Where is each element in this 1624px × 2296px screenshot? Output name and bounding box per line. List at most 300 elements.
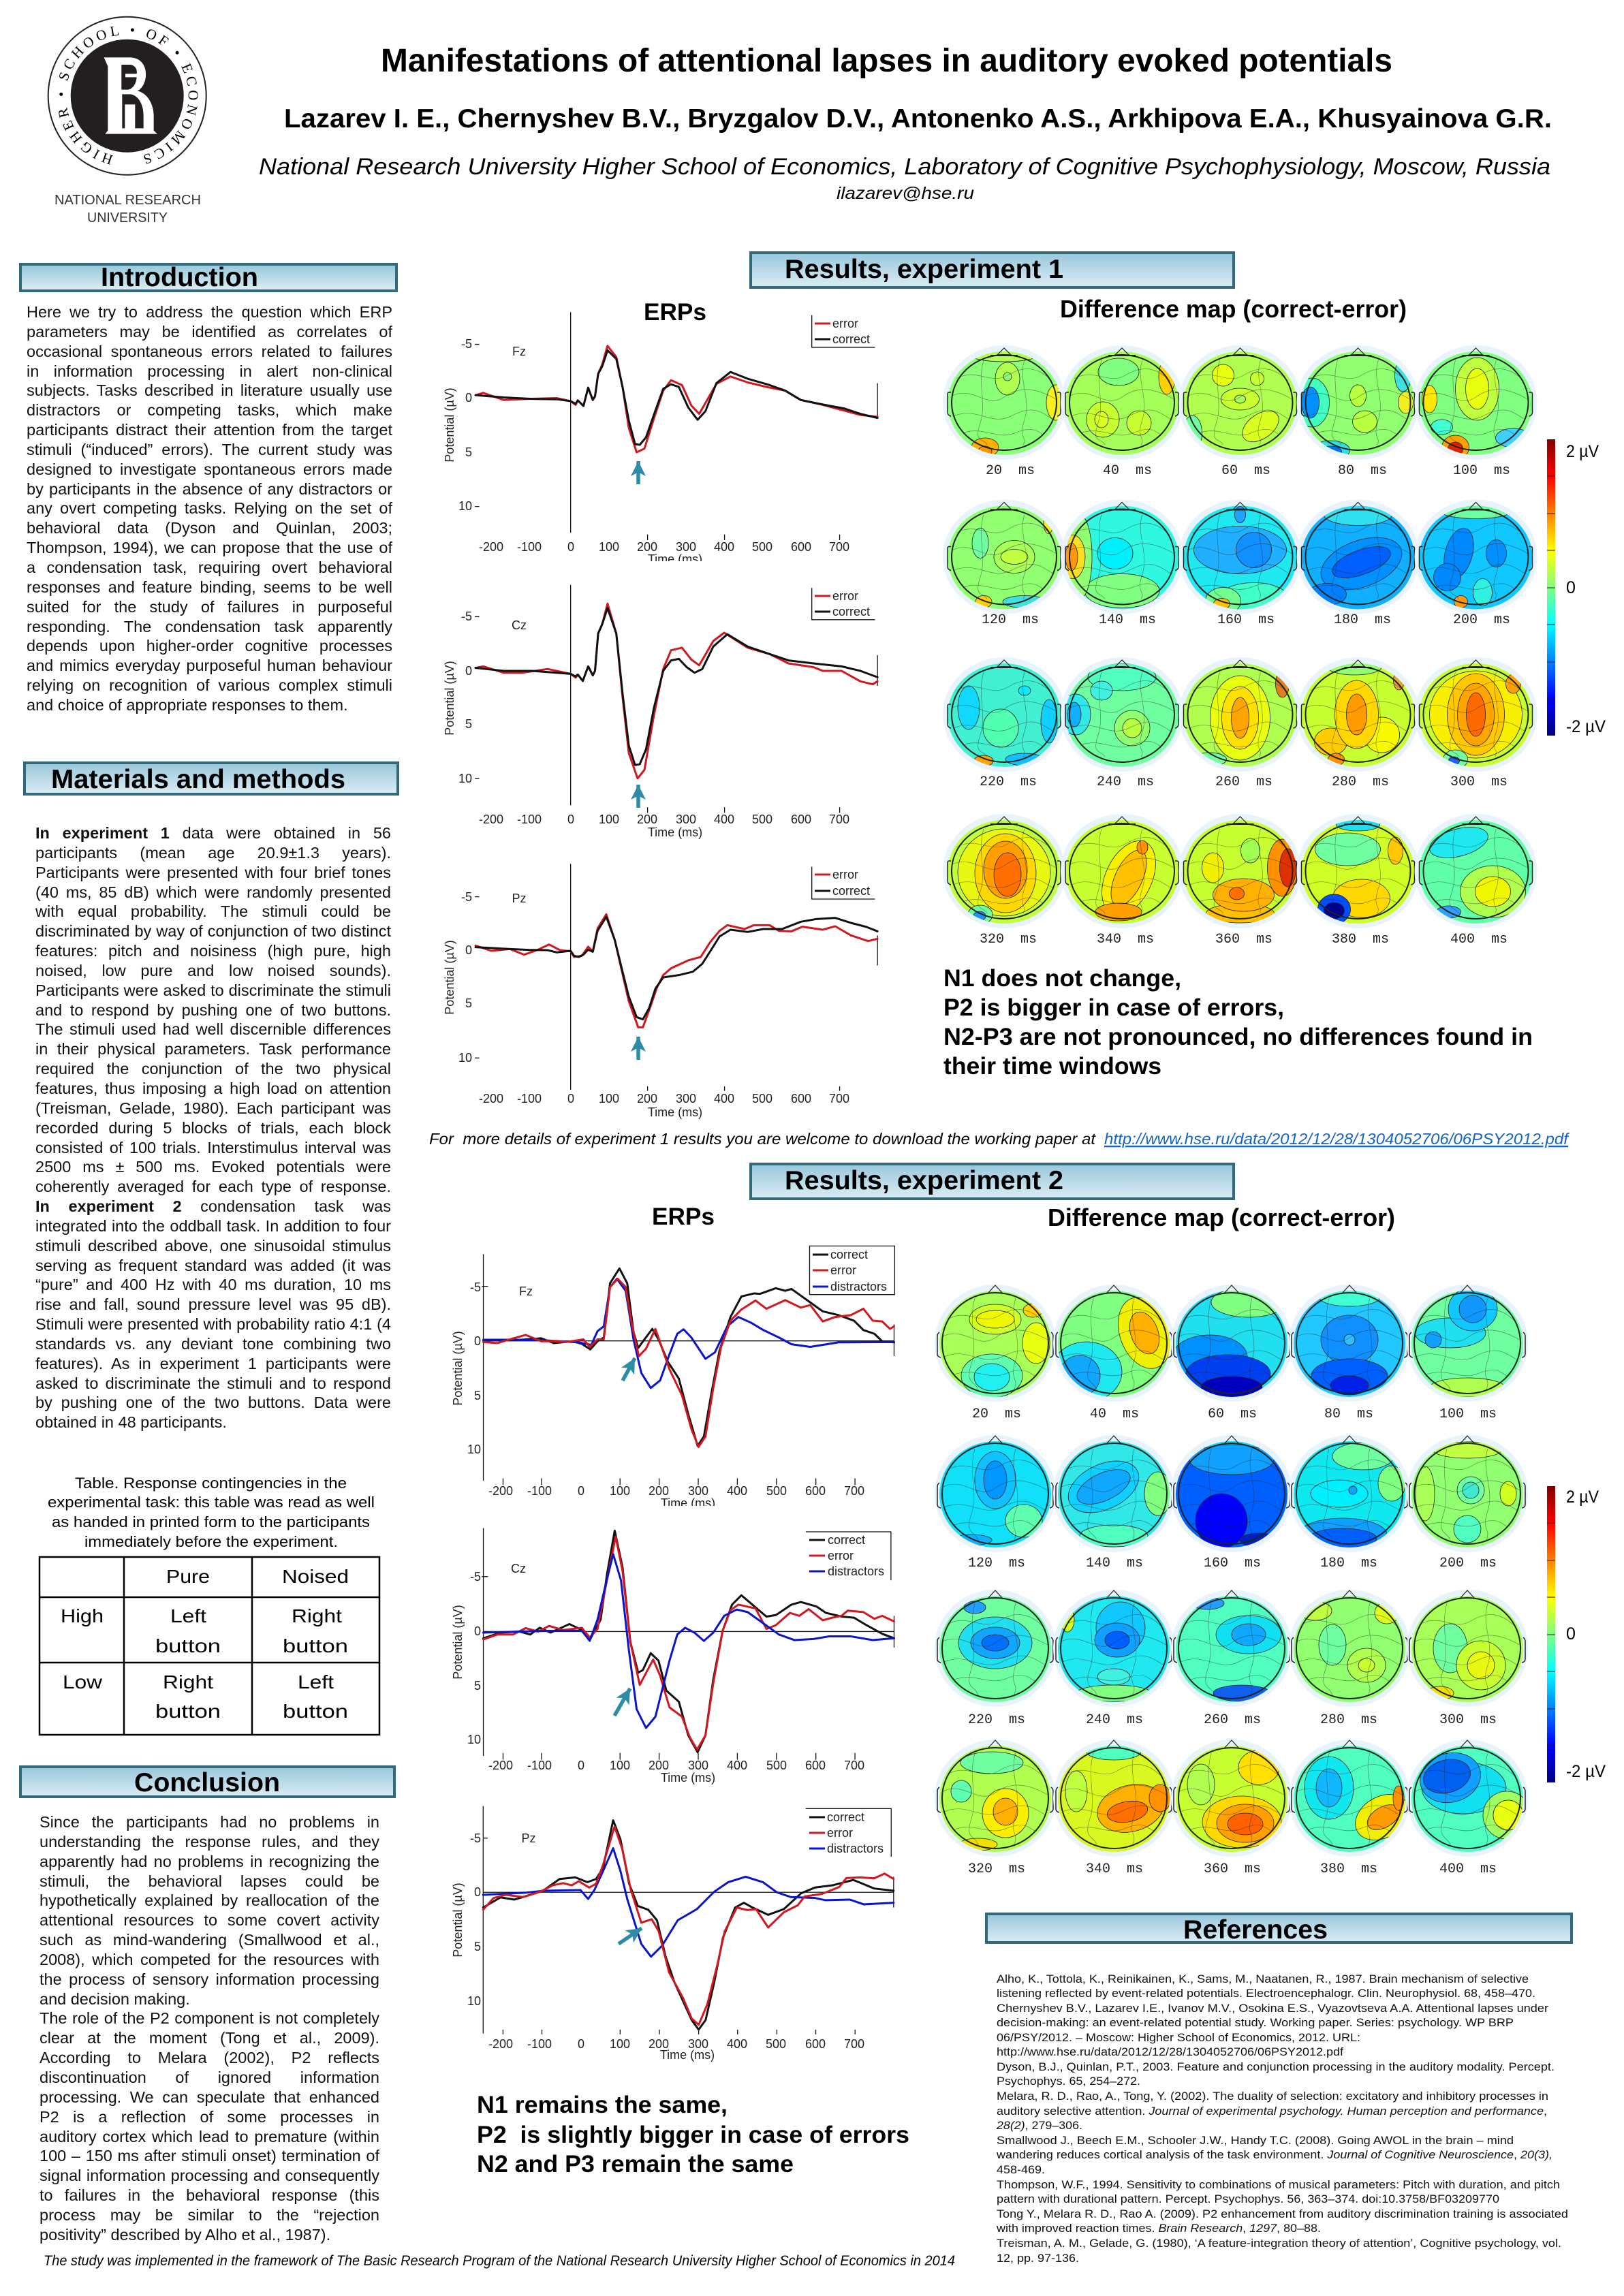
time labels: experiment 1: 160 ms bbox=[1217, 612, 1275, 628]
chart: experiment 1 Fz: 300 bbox=[676, 540, 696, 554]
chart: experiment 1 Pz: 700 bbox=[829, 1092, 849, 1105]
topomap 100 ms bbox=[1406, 1285, 1529, 1402]
table: response contingencies bbox=[40, 1557, 379, 1735]
chart: experiment 1 Pz: 0 bbox=[465, 943, 472, 957]
chart: experiment 1 Cz: 700 bbox=[829, 813, 849, 826]
chart: experiment 2 Fz: distractors bbox=[830, 1280, 887, 1293]
text block: introduction: Here we try to address the question which ERP bbox=[27, 303, 392, 321]
text block: introduction: stimuli (“induced” errors). The current study was bbox=[27, 441, 392, 458]
text block: introduction: and choice of appropriate responses to them. bbox=[27, 696, 348, 714]
chart: experiment 1 Cz: 5 bbox=[465, 717, 472, 731]
title: Manifestations of attentional lapses in auditory evoked potentials bbox=[381, 43, 1392, 79]
text block: materials and methods: features: pitch and noisiness (high pure, high bbox=[35, 942, 391, 960]
chart: experiment 1 Fz: 100 bbox=[599, 540, 619, 554]
references list: Chernyshev B.V., Lazarev I.E., Ivanov M.V., Osokina E.S., Vyazovtseva A.A. Attentional lapses under bbox=[997, 2002, 1548, 2015]
text block: introduction: subjects. Tasks described in literature usually use bbox=[27, 381, 392, 399]
chart: experiment 2 Cz: 300 bbox=[688, 1759, 708, 1772]
table: response contingencies: Left bbox=[298, 1671, 334, 1693]
colour scale: experiment 2: -2 µV bbox=[1566, 1762, 1606, 1781]
chart: experiment 1 Cz: 100 bbox=[599, 813, 619, 826]
text block: materials and methods: (Treisman, Gelade, 1980). Each participant was bbox=[35, 1099, 391, 1117]
chart: experiment 1 Pz: 200 bbox=[637, 1092, 657, 1105]
chart: experiment 1 Fz: 600 bbox=[791, 540, 811, 554]
topomap 160 ms bbox=[1170, 1435, 1293, 1552]
chart: experiment 2 Fz: -5 bbox=[470, 1280, 481, 1294]
heading: Introduction bbox=[20, 263, 396, 292]
note: working paper link: http://www.hse.ru/data/2012/12/28/1304052706/06PSY2012.pdf bbox=[1104, 1130, 1570, 1148]
time labels: experiment 2: 360 ms bbox=[1204, 1861, 1261, 1877]
topomap 100 ms bbox=[1414, 345, 1537, 460]
references list: 458-469. bbox=[997, 2163, 1045, 2176]
text block: conclusion: 100 – 150 ms after stimuli onset) termination of bbox=[40, 2147, 379, 2165]
chart: experiment 2 Fz: -200 bbox=[488, 1484, 513, 1498]
table caption: as handed in printed form to the participants bbox=[52, 1513, 370, 1530]
chart: experiment 1 Fz: 400 bbox=[714, 540, 734, 554]
time labels: experiment 2: 320 ms bbox=[968, 1861, 1025, 1877]
chart: experiment 2 Cz: 100 bbox=[610, 1759, 630, 1772]
text block: materials and methods: standards vs. any deviant tone combining two bbox=[35, 1335, 391, 1353]
text block: introduction: designed to investigate spontaneous errors made bbox=[27, 460, 392, 478]
chart: experiment 1 Fz: Time (ms) bbox=[648, 552, 702, 566]
table: response contingencies: Right bbox=[163, 1671, 213, 1693]
references list: 12, pp. 97-136. bbox=[997, 2252, 1079, 2265]
subheading: difference map experiment 1: Difference map (correct-error) bbox=[1060, 295, 1407, 323]
colour scale: experiment 2: 2 µV bbox=[1566, 1488, 1599, 1507]
table: response contingencies: button bbox=[283, 1635, 348, 1656]
chart: experiment 1 Fz: 5 bbox=[465, 445, 472, 459]
references list: wandering reduces cortical analysis of the task environment. Journal of Cognitive Neuroscience , 20(3), bbox=[996, 2148, 1552, 2161]
text block: materials and methods: (40 ms, 85 dB) which were randomly presented bbox=[35, 883, 391, 901]
chart: experiment 2 Pz: 0 bbox=[474, 1885, 481, 1899]
time labels: experiment 1: 100 ms bbox=[1453, 463, 1510, 479]
topomap 180 ms bbox=[1288, 1435, 1411, 1552]
topomap 300 ms bbox=[1414, 657, 1537, 772]
chart: experiment 2 Pz: 700 bbox=[844, 2037, 864, 2051]
note: working paper link bbox=[429, 1130, 1570, 1148]
time labels: experiment 1: 340 ms bbox=[1097, 932, 1154, 947]
topomap 120 ms bbox=[943, 499, 1065, 614]
chart: experiment 2 Cz: 0 bbox=[578, 1759, 584, 1772]
text block: conclusion: such as mind-wandering (Smallwood et al., bbox=[40, 1931, 379, 1949]
text block: introduction: occasional spontaneous errors related to failures bbox=[27, 343, 392, 360]
findings: experiment 1: N2-P3 are not pronounced, no differences found in bbox=[943, 1024, 1533, 1050]
topomap 200 ms bbox=[1414, 499, 1537, 614]
chart: experiment 2 Fz: 0 bbox=[474, 1334, 481, 1348]
text block: materials and methods: Participants were presented with four brief tones bbox=[35, 864, 391, 881]
colour scale: experiment 1: 2 µV bbox=[1566, 442, 1599, 461]
chart: experiment 1 Pz: correct bbox=[832, 884, 870, 898]
text block: introduction: responding. The condensation task apparently bbox=[27, 617, 392, 635]
findings: experiment 2: P2 is slightly bigger in case of errors bbox=[477, 2122, 909, 2148]
text block: materials and methods: features, thus imposing a high load on attention bbox=[35, 1080, 391, 1097]
chart: experiment 1 Pz: 500 bbox=[752, 1092, 772, 1105]
chart: experiment 2 Pz: 600 bbox=[805, 2037, 826, 2051]
topomap 20 ms bbox=[934, 1285, 1057, 1402]
affiliation: National Research University Higher School of Economics, Laboratory of Cognitive Psychophysiology, Moscow, Russia bbox=[259, 154, 1550, 180]
chart: experiment 2 Fz: 500 bbox=[766, 1484, 787, 1498]
chart: experiment 2 Cz: 200 bbox=[649, 1759, 669, 1772]
text block: materials and methods: Participants were asked to discriminate the stimuli bbox=[35, 981, 391, 999]
topomap 220 ms bbox=[934, 1590, 1057, 1707]
text block: introduction: in information processing in alert non-clinical bbox=[27, 362, 392, 380]
topomap 280 ms bbox=[1288, 1590, 1411, 1707]
time labels: experiment 1: 20 ms bbox=[986, 463, 1035, 479]
chart: experiment 2 Fz: Fz bbox=[519, 1285, 533, 1298]
text block: materials and methods: obtained in 48 participants. bbox=[35, 1413, 227, 1431]
chart: experiment 2 Pz: error bbox=[827, 1826, 853, 1840]
chart: experiment 1 Fz: -100 bbox=[517, 540, 542, 554]
text block: introduction: parameters may be identified as correlates of bbox=[27, 323, 392, 341]
findings: experiment 2 bbox=[477, 2092, 909, 2177]
chart: experiment 1 Fz: 200 bbox=[637, 540, 657, 554]
topomap 180 ms bbox=[1297, 499, 1420, 614]
chart: experiment 1 Pz: 5 bbox=[465, 996, 472, 1010]
topomap 140 ms bbox=[1061, 499, 1183, 614]
chart: experiment 1 Cz: 500 bbox=[752, 813, 772, 826]
text block: conclusion: to failures in the behavioral response (this bbox=[40, 2186, 379, 2204]
chart: experiment 2 Fz: Potential (µV) bbox=[451, 1331, 465, 1406]
heading: References: References bbox=[1183, 1915, 1328, 1945]
chart: experiment 1 Fz: correct bbox=[832, 332, 870, 346]
chart: experiment 2 Pz: 500 bbox=[766, 2037, 786, 2051]
chart: experiment 2 Cz: -5 bbox=[470, 1570, 481, 1584]
references list: decision-making: an event-related potential study. Working paper. Series: psychology. WP BRP bbox=[997, 2016, 1514, 2029]
chart: experiment 1 Pz: Pz bbox=[512, 892, 527, 905]
chart: experiment 2 Cz: -200 bbox=[488, 1759, 513, 1772]
chart: experiment 2 Cz: 5 bbox=[474, 1679, 481, 1693]
topomap 240 ms bbox=[1052, 1590, 1175, 1707]
time labels: experiment 1: 380 ms bbox=[1332, 932, 1389, 947]
heading: Results, experiment 2: Results, experiment 2 bbox=[785, 1166, 1063, 1195]
chart: experiment 1 Pz: 600 bbox=[791, 1092, 811, 1105]
text block: materials and methods: stimuli described above, one sinusoidal stimulus bbox=[35, 1237, 391, 1255]
findings: experiment 2: N2 and P3 remain the same bbox=[477, 2151, 794, 2177]
heading: Conclusion bbox=[20, 1767, 394, 1797]
chart: experiment 1 Cz: -100 bbox=[517, 813, 542, 826]
text block: conclusion: stimuli, the behavioral lapses could be bbox=[40, 1872, 379, 1890]
time labels: experiment 2: 80 ms bbox=[1324, 1406, 1373, 1422]
chart: experiment 2 Fz bbox=[451, 1246, 894, 1513]
topomap 140 ms bbox=[1052, 1435, 1175, 1552]
topomap 400 ms bbox=[1414, 813, 1537, 929]
text block: materials and methods: In experiment 2 condensation task was bbox=[35, 1197, 391, 1215]
chart: experiment 1 Fz: Fz bbox=[512, 345, 526, 358]
text block: materials and methods: coherently averaged for each type of response. bbox=[35, 1178, 391, 1195]
text block: conclusion: The role of the P2 component is not completely bbox=[40, 2009, 379, 2027]
chart: experiment 1 Cz bbox=[443, 585, 877, 839]
table: response contingencies: button bbox=[283, 1701, 348, 1722]
references list: http://www.hse.ru/data/2012/12/28/1304052706/06PSY2012.pdf bbox=[997, 2045, 1343, 2058]
chart: experiment 2 Cz: 400 bbox=[727, 1759, 747, 1772]
chart: experiment 1 Cz: Time (ms) bbox=[648, 825, 702, 839]
time labels: experiment 1: 260 ms bbox=[1215, 774, 1272, 790]
chart: experiment 1 Cz: 300 bbox=[676, 813, 696, 826]
text block: materials and methods: The stimuli used had well discernible differences bbox=[35, 1020, 391, 1038]
topomap 320 ms bbox=[943, 813, 1065, 929]
topomap 300 ms bbox=[1406, 1590, 1529, 1707]
time labels: experiment 2: 20 ms bbox=[972, 1406, 1021, 1422]
topomap 260 ms bbox=[1178, 657, 1301, 772]
references list: Melara, R. D., Rao, A., Tong, Y. (2002). The duality of selection: excitatory and inhibitory processes in bbox=[997, 2090, 1548, 2103]
chart: experiment 1 Cz: 0 bbox=[465, 664, 472, 678]
table: response contingencies: button bbox=[155, 1701, 221, 1722]
table: response contingencies: Low bbox=[63, 1671, 103, 1693]
chart: experiment 1 Cz: Cz bbox=[512, 618, 527, 632]
chart: experiment 2 Fz: 0 bbox=[578, 1484, 584, 1498]
chart: experiment 1 Pz: 400 bbox=[714, 1092, 734, 1105]
heading: Results, experiment 2 bbox=[751, 1164, 1234, 1199]
chart: experiment 1 Pz: 0 bbox=[567, 1092, 574, 1105]
chart: experiment 2 Fz: 5 bbox=[474, 1389, 481, 1402]
chart: experiment 2 Fz: 300 bbox=[688, 1484, 708, 1498]
time labels: experiment 1: 180 ms bbox=[1334, 612, 1391, 628]
text block: conclusion: According to Melara (2002), P2 reflects bbox=[40, 2049, 379, 2066]
text block: conclusion: hypothetically explained by reallocation of the bbox=[40, 1891, 379, 1909]
chart: experiment 2 Pz: 5 bbox=[474, 1940, 481, 1953]
chart: experiment 1 Fz bbox=[443, 312, 877, 568]
text block: introduction: responses and feature binding, seems to be well bbox=[27, 578, 392, 596]
chart: experiment 2 Fz: 100 bbox=[610, 1484, 630, 1498]
text block: materials and methods: features). As in experiment 1 participants were bbox=[35, 1355, 391, 1372]
table: response contingencies: Noised bbox=[282, 1566, 349, 1587]
heading: Results, experiment 1: Results, experiment 1 bbox=[785, 255, 1063, 284]
topomap 60 ms bbox=[1170, 1285, 1293, 1402]
topomap 380 ms bbox=[1297, 813, 1420, 929]
findings: experiment 1: N1 does not change, bbox=[943, 965, 1181, 992]
chart: experiment 1 Fz: 0 bbox=[567, 540, 574, 554]
topomap 340 ms bbox=[1052, 1740, 1175, 1857]
text block: conclusion: process may be similar to the “rejection bbox=[40, 2206, 379, 2224]
time labels: experiment 1: 40 ms bbox=[1103, 463, 1152, 479]
time labels: experiment 1: 360 ms bbox=[1215, 932, 1272, 947]
text block: materials and methods: participants (mean age 20.9±1.3 years). bbox=[35, 844, 391, 862]
chart: experiment 1 Cz: -200 bbox=[479, 813, 503, 826]
time labels: experiment 2: 160 ms bbox=[1204, 1556, 1261, 1571]
topomap 40 ms bbox=[1051, 1285, 1180, 1402]
note: working paper link: For more details of experiment 1 results you are welcome to download the working paper at bbox=[429, 1130, 1097, 1148]
table caption bbox=[48, 1475, 375, 1550]
chart: experiment 2 Pz: 400 bbox=[727, 2037, 747, 2051]
chart: experiment 2 Fz: error bbox=[830, 1263, 856, 1277]
subheading: ERPs experiment 1: ERPs bbox=[644, 299, 706, 326]
chart: experiment 1 Cz: 10 bbox=[458, 772, 472, 785]
text block: conclusion: 2008), which competed for the resources with bbox=[40, 1951, 379, 1968]
topomap 40 ms bbox=[1061, 345, 1183, 460]
text block: conclusion: and decision making. bbox=[40, 1990, 190, 2008]
text block: materials and methods: and to respond by pushing one of two buttons. bbox=[35, 1001, 391, 1019]
text block: materials and methods: “pure” and 400 Hz with 40 ms duration, 10 ms bbox=[35, 1276, 391, 1293]
chart: experiment 2 Pz: -5 bbox=[470, 1831, 481, 1845]
text block: conclusion: the process of sensory information processing bbox=[40, 1970, 379, 1988]
topomap 80 ms bbox=[1288, 1285, 1411, 1402]
time labels: experiment 2: 100 ms bbox=[1439, 1406, 1497, 1422]
text block: materials and methods: consisted of 100 trials. Interstimulus interval was bbox=[35, 1139, 391, 1157]
heading: References bbox=[986, 1914, 1572, 1945]
logo caption: UNIVERSITY bbox=[87, 210, 168, 225]
text block: introduction bbox=[27, 303, 392, 714]
time labels: experiment 1: 140 ms bbox=[1099, 612, 1156, 628]
chart: experiment 1 Pz: -100 bbox=[517, 1092, 542, 1105]
references list: pattern with durational pattern. Percept. Psychophys. 56, 363–374. doi:10.3758/BF03209770 bbox=[997, 2192, 1499, 2205]
table: response contingencies: button bbox=[155, 1635, 221, 1656]
findings: experiment 2: N1 remains the same, bbox=[477, 2092, 728, 2118]
text block: conclusion: Since the participants had no problems in bbox=[40, 1813, 379, 1831]
time labels: experiment 1: 400 ms bbox=[1450, 932, 1508, 947]
text block: introduction: a condensation task, requiring overt behavioral bbox=[27, 559, 392, 576]
chart: experiment 1 Pz: -200 bbox=[479, 1092, 503, 1105]
colour scale: experiment 1 bbox=[1547, 439, 1606, 736]
chart: experiment 1 Fz: 10 bbox=[458, 499, 472, 513]
chart: experiment 1 Fz: 700 bbox=[829, 540, 849, 554]
references list: 06/PSY/2012. – Moscow: Higher School of Economics, 2012. URL: bbox=[997, 2031, 1360, 2044]
colour scale: experiment 1: -2 µV bbox=[1566, 717, 1606, 736]
text block: conclusion: positivity” described by Alho et al., 1987). bbox=[40, 2226, 330, 2244]
topomap 200 ms bbox=[1406, 1435, 1529, 1552]
text block: conclusion: P2 is a reflection of some processes in bbox=[40, 2108, 379, 2126]
chart: experiment 2 Fz: 700 bbox=[844, 1484, 864, 1498]
time labels: experiment 2: 240 ms bbox=[1086, 1712, 1143, 1728]
heading: Results, experiment 1 bbox=[751, 253, 1234, 287]
chart: experiment 1 Cz: 0 bbox=[567, 813, 574, 826]
chart: experiment 2 Cz: distractors bbox=[828, 1564, 884, 1578]
references list: with improved reaction times. Brain Research , 1297, 80–88. bbox=[996, 2222, 1321, 2235]
colour scale: experiment 1: 0 bbox=[1566, 578, 1576, 597]
time labels: experiment 1: 240 ms bbox=[1097, 774, 1154, 790]
table: response contingencies: Right bbox=[292, 1605, 342, 1626]
chart: experiment 2 Pz: Pz bbox=[521, 1831, 536, 1845]
references list: 28(2), 279–306. bbox=[996, 2119, 1082, 2132]
topomap 360 ms bbox=[1170, 1740, 1293, 1857]
chart: experiment 2 Cz: 700 bbox=[844, 1759, 864, 1772]
chart: experiment 1 Cz: 200 bbox=[637, 813, 657, 826]
time labels: experiment 2: 280 ms bbox=[1320, 1712, 1377, 1728]
chart: experiment 2 Cz: -100 bbox=[527, 1759, 552, 1772]
chart: experiment 2 Cz bbox=[451, 1528, 894, 1784]
chart: experiment 2 Pz: Potential (µV) bbox=[451, 1883, 465, 1957]
chart: experiment 2 Cz: Time (ms) bbox=[661, 1771, 715, 1784]
text block: introduction: depends upon higher-order cognitive processes bbox=[27, 637, 392, 655]
topomap 220 ms bbox=[943, 657, 1065, 772]
time labels: experiment 2: 220 ms bbox=[968, 1712, 1025, 1728]
table caption: immediately before the experiment. bbox=[84, 1533, 338, 1550]
chart: experiment 2 Pz: Time (ms) bbox=[660, 2048, 715, 2062]
table caption: experimental task: this table was read as well bbox=[48, 1494, 375, 1511]
chart: experiment 1 Fz: 500 bbox=[752, 540, 772, 554]
topomap 20 ms bbox=[943, 345, 1065, 460]
topomap 120 ms bbox=[934, 1435, 1057, 1552]
text block: introduction: behavioral data (Dyson and Quinlan, 2003; bbox=[27, 519, 392, 537]
topomap 400 ms bbox=[1406, 1740, 1531, 1857]
chart: experiment 2 Fz: -100 bbox=[527, 1484, 552, 1498]
time labels: experiment 2: 140 ms bbox=[1086, 1556, 1143, 1571]
references list: Alho, K., Tottola, K., Reinikainen, K., Sams, M., Naatanen, R., 1987. Brain mechanism of selective bbox=[997, 1972, 1529, 1985]
colour scale: experiment 2 bbox=[1547, 1486, 1606, 1782]
topomaps: experiment 2 bbox=[934, 1285, 1531, 1857]
findings: experiment 1: their time windows bbox=[943, 1053, 1161, 1080]
text block: conclusion: auditory cortex which lead to premature (within bbox=[40, 2128, 379, 2145]
chart: experiment 2 Fz: 600 bbox=[805, 1484, 826, 1498]
time labels: experiment 1: 60 ms bbox=[1221, 463, 1270, 479]
text block: introduction: any overt competing tasks. Relying on the set of bbox=[27, 499, 392, 517]
chart: experiment 2 Pz: 300 bbox=[688, 2037, 708, 2051]
text block: materials and methods: required the conjunction of the two physical bbox=[35, 1060, 391, 1078]
time labels: experiment 1: 80 ms bbox=[1338, 463, 1387, 479]
chart: experiment 1 Cz: correct bbox=[832, 605, 870, 618]
topomaps: experiment 1 bbox=[943, 345, 1537, 929]
time labels: experiment 2: 380 ms bbox=[1320, 1861, 1377, 1877]
time labels: experiment 1: 200 ms bbox=[1453, 612, 1510, 628]
chart: experiment 2 Fz: 400 bbox=[727, 1484, 747, 1498]
chart: experiment 2 Pz bbox=[451, 1806, 894, 2062]
text block: materials and methods: rise and fall, sound pressure level was 95 dB). bbox=[35, 1295, 391, 1313]
text block: conclusion: signal information processing and consequently bbox=[40, 2167, 379, 2184]
colour scale: experiment 2: 0 bbox=[1566, 1624, 1576, 1644]
text block: conclusion: apparently had no problems in recognizing the bbox=[40, 1853, 379, 1870]
text block: introduction: relying on recognition of various complex stimuli bbox=[27, 676, 392, 694]
references list: Tong Y., Melara R. D., Rao A. (2009). P2 enhancement from auditory discrimination training is associated bbox=[997, 2207, 1568, 2220]
chart: experiment 1 Fz: 0 bbox=[465, 391, 472, 405]
time labels: experiment 1: 320 ms bbox=[980, 932, 1037, 947]
time labels: experiment 1: 280 ms bbox=[1332, 774, 1389, 790]
text block: conclusion: attentional resources to some covert activity bbox=[40, 1911, 379, 1929]
references list: Treisman, A. M., Gelade, G. (1980), ‘A feature-integration theory of attention’, Cognitive psychology, vol. bbox=[997, 2237, 1561, 2250]
chart: experiment 1 Cz: error bbox=[832, 589, 858, 603]
time labels: experiment 2: 400 ms bbox=[1439, 1861, 1497, 1877]
text block: materials and methods: In experiment 1 data were obtained in 56 bbox=[35, 824, 391, 842]
text block: materials and methods: integrated into the oddball task. In addition to four bbox=[35, 1217, 391, 1235]
chart: experiment 1 Fz: -5 bbox=[461, 337, 472, 351]
findings: experiment 1: P2 is bigger in case of errors, bbox=[943, 994, 1284, 1021]
time labels: experiment 2: 180 ms bbox=[1320, 1556, 1377, 1571]
text block: introduction: Thompson, 1994), we can propose that the use of bbox=[27, 539, 392, 556]
time labels: experiment 1: 220 ms bbox=[980, 774, 1037, 790]
time labels: experiment 2: 200 ms bbox=[1439, 1556, 1497, 1571]
time labels: experiment 2: 40 ms bbox=[1090, 1406, 1139, 1422]
chart: experiment 2 Cz: correct bbox=[828, 1533, 865, 1547]
chart: experiment 2 Pz: correct bbox=[827, 1810, 864, 1824]
chart: experiment 1 Cz: Potential (µV) bbox=[443, 661, 456, 736]
chart: experiment 2 Fz: 200 bbox=[649, 1484, 669, 1498]
subheading: ERPs experiment 2: ERPs bbox=[652, 1204, 715, 1230]
table caption: Table. Response contingencies in the bbox=[75, 1475, 347, 1492]
chart: experiment 1 Pz: 100 bbox=[599, 1092, 619, 1105]
references list: listening reflected by event-related potentials. Electroencephalogr. Clin. Neurophysiol. 68, 458–470. bbox=[997, 1987, 1535, 2000]
text block: conclusion: understanding the response rules, and they bbox=[40, 1833, 379, 1851]
subheading: difference map experiment 2: Difference map (correct-error) bbox=[1048, 1204, 1395, 1231]
text block: conclusion: clear at the moment (Tong et al., 2009). bbox=[40, 2029, 379, 2047]
table: response contingencies: Pure bbox=[166, 1566, 210, 1587]
text block: materials and methods: with equal probability. The stimuli could be bbox=[35, 902, 391, 920]
time labels: experiment 1: 300 ms bbox=[1450, 774, 1508, 790]
chart: experiment 2 Fz: Time (ms) bbox=[661, 1496, 715, 1510]
chart: experiment 2 Cz: 600 bbox=[805, 1759, 826, 1772]
text block: materials and methods bbox=[35, 824, 391, 1431]
time labels: experiment 1: 120 ms bbox=[982, 612, 1039, 628]
text block: materials and methods: noised, low pure and low noised sounds). bbox=[35, 962, 391, 979]
time labels: experiment 2: 60 ms bbox=[1208, 1406, 1257, 1422]
heading: Materials and methods: Materials and methods bbox=[51, 765, 345, 794]
table: response contingencies: High bbox=[61, 1605, 104, 1626]
chart: experiment 2 Cz: Potential (µV) bbox=[451, 1605, 465, 1680]
text block: introduction: by participants in the absence of any distractors or bbox=[27, 480, 392, 498]
text block: conclusion: processing. We can speculate that enhanced bbox=[40, 2088, 379, 2106]
chart: experiment 1 Pz: error bbox=[832, 868, 858, 881]
logo caption bbox=[54, 193, 201, 225]
text block: materials and methods: asked to discriminate the stimuli and to respond bbox=[35, 1374, 391, 1392]
authors: Lazarev I. E., Chernyshev B.V., Bryzgalov D.V., Antonenko A.S., Arkhipova E.A., Khusyainova G.R. bbox=[284, 104, 1552, 133]
chart: experiment 2 Pz: 100 bbox=[610, 2037, 630, 2051]
references list: Psychophys. 65, 254–272. bbox=[997, 2075, 1140, 2088]
